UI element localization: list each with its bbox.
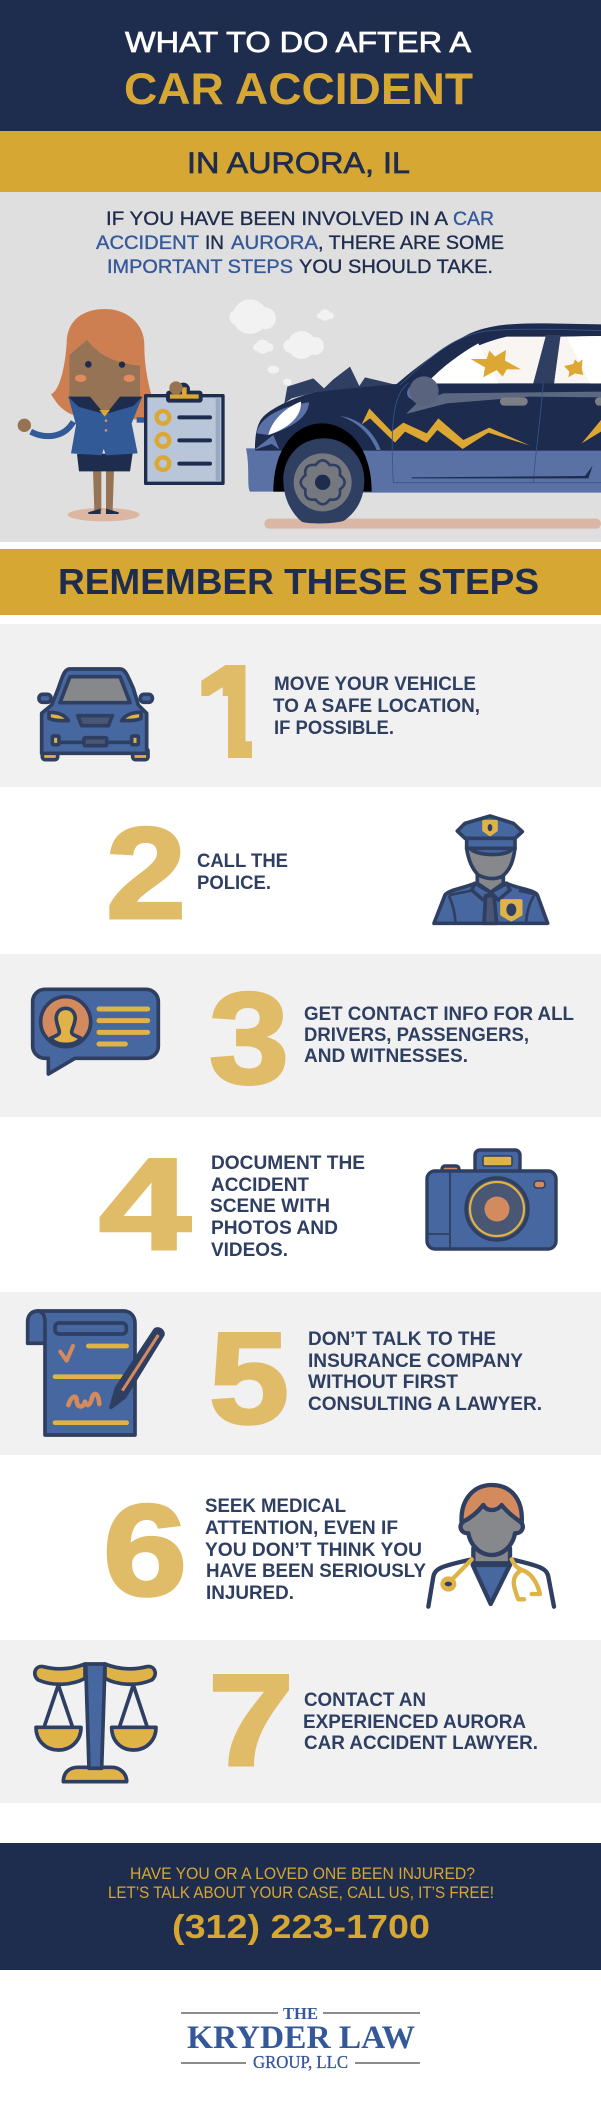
step 1 text — [273, 673, 480, 739]
number 4: 4 — [99, 1131, 191, 1277]
step 6 text — [205, 1495, 426, 1604]
step 6 text: HAVE BEEN SERIOUSLY — [206, 1560, 426, 1582]
step 1 text: MOVE YOUR VEHICLE — [274, 673, 476, 695]
intro text: YOU SHOULD TAKE. — [299, 256, 493, 278]
panel: intro scene — [0, 192, 601, 542]
number 2: 2 — [106, 800, 186, 946]
step 6 text: INJURED. — [206, 1582, 294, 1604]
location band — [0, 131, 601, 192]
step 7 text: CONTACT AN — [304, 1689, 426, 1711]
logo: THE — [283, 2004, 318, 2023]
call to action text: HAVE YOU OR A LOVED ONE BEEN INJURED? — [130, 1864, 475, 1883]
step 6 text: SEEK MEDICAL — [205, 1495, 346, 1517]
step 2 text: POLICE. — [197, 872, 271, 894]
intro text: ACCIDENT — [96, 232, 199, 254]
call to action panel — [0, 1843, 601, 1970]
intro text: IF YOU HAVE BEEN INVOLVED IN A — [106, 208, 448, 230]
icon: contact speech bubble — [33, 989, 158, 1074]
section heading band — [0, 549, 601, 615]
step 7 text: EXPERIENCED AURORA — [303, 1711, 526, 1733]
icon: police officer — [434, 816, 548, 923]
number 5: 5 — [209, 1305, 289, 1451]
step 2 text — [197, 850, 288, 894]
icon: camera — [427, 1150, 556, 1249]
step 1 text: TO A SAFE LOCATION, — [273, 695, 480, 717]
step 1 panel — [0, 624, 601, 787]
logo: KRYDER LAW — [187, 2020, 415, 2056]
phone number: (312) 223-1700 — [172, 1908, 430, 1945]
step 3 text — [304, 1003, 574, 1067]
step 4 text: PHOTOS AND — [211, 1217, 338, 1239]
call to action text: LET’S TALK ABOUT YOUR CASE, CALL US, IT’S FREE! — [108, 1883, 494, 1902]
illustration: woman with clipboard — [18, 309, 223, 521]
step 4 text: SCENE WITH — [210, 1195, 330, 1217]
step 3 text: DRIVERS, PASSENGERS, — [304, 1024, 529, 1046]
step 5 text: CONSULTING A LAWYER. — [308, 1393, 542, 1415]
step 1 text: IF POSSIBLE. — [274, 717, 394, 739]
step 5 text — [308, 1328, 542, 1415]
step 4 text: VIDEOS. — [211, 1239, 288, 1261]
intro text: , THERE ARE SOME — [318, 232, 504, 254]
step 3 text: GET CONTACT INFO FOR ALL — [304, 1003, 574, 1025]
logo: GROUP, LLC — [253, 2052, 348, 2072]
number 6: 6 — [103, 1477, 187, 1623]
number 1: 1 — [195, 639, 267, 785]
icon: scales of justice — [35, 1664, 156, 1782]
step 3 panel — [0, 954, 601, 1117]
number 3: 3 — [209, 965, 289, 1111]
step 3 text: AND WITNESSES. — [304, 1045, 468, 1067]
intro text: IMPORTANT STEPS — [107, 256, 293, 278]
step 4 text: DOCUMENT THE — [211, 1152, 365, 1174]
icon: car front — [39, 669, 152, 760]
step 4 text — [210, 1152, 365, 1261]
intro text: AURORA — [231, 232, 318, 254]
step 4 text: ACCIDENT — [211, 1174, 309, 1196]
step 5 text: INSURANCE COMPANY — [308, 1350, 523, 1372]
step 2 panel — [106, 800, 548, 946]
title line 2: CAR ACCIDENT — [124, 65, 473, 114]
step 7 text — [303, 1689, 538, 1754]
step 5 panel — [0, 1292, 601, 1455]
section heading band: REMEMBER THESE STEPS — [58, 561, 539, 602]
step 6 text: YOU DON’T THINK YOU — [205, 1539, 422, 1561]
title line 1: WHAT TO DO AFTER A — [125, 27, 471, 59]
icon: doctor — [428, 1485, 554, 1607]
intro text: IN — [205, 232, 224, 254]
header panel — [0, 0, 601, 131]
step 4 panel — [99, 1131, 556, 1277]
intro text: CAR — [453, 208, 494, 230]
intro text — [96, 208, 504, 278]
step 5 text: DON’T TALK TO THE — [308, 1328, 496, 1350]
step 6 text: ATTENTION, EVEN IF — [205, 1517, 398, 1539]
illustration: crashed car with smoke — [229, 299, 601, 529]
step 6 panel — [103, 1477, 554, 1623]
call to action text — [108, 1864, 494, 1902]
logo — [181, 2004, 420, 2072]
icon: document and pen — [28, 1311, 163, 1435]
step 7 panel — [0, 1640, 601, 1803]
step 2 text: CALL THE — [197, 850, 288, 872]
number 7: 7 — [208, 1647, 294, 1793]
step 5 text: WITHOUT FIRST — [308, 1371, 458, 1393]
step 7 text: CAR ACCIDENT LAWYER. — [304, 1732, 538, 1754]
location band: IN AURORA, IL — [187, 147, 410, 180]
